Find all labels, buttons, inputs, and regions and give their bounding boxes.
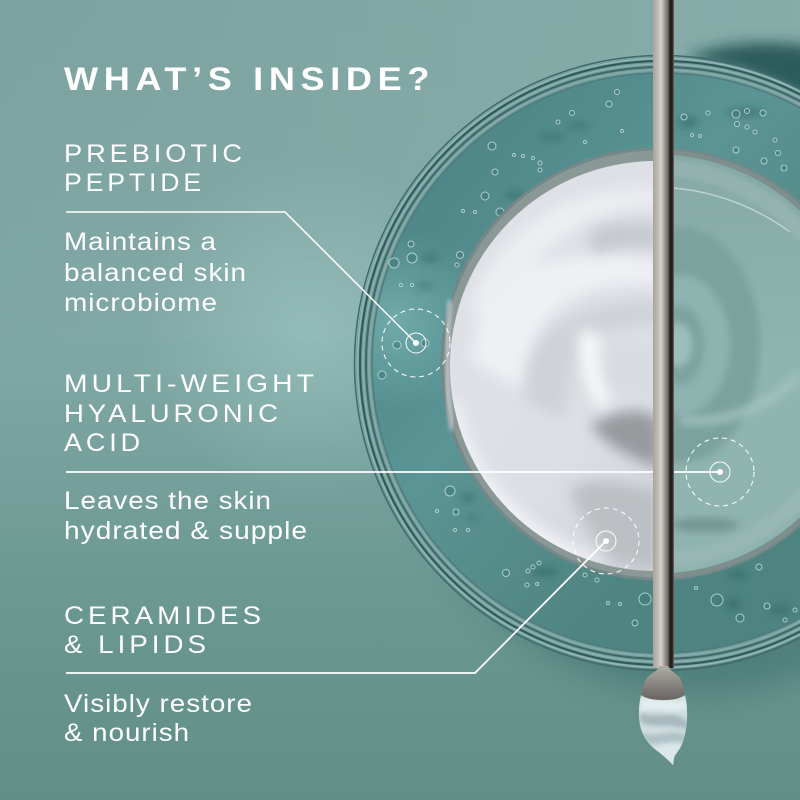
cream in bowl: [446, 161, 653, 571]
spatula head: [640, 666, 687, 712]
heading: ceramides and lipids: [64, 602, 265, 659]
heading: ceramides and lipids: & LIPIDS: [64, 631, 210, 659]
marker: ceramides and lipids: [573, 508, 639, 574]
heading: prebiotic peptide: PREBIOTIC: [64, 140, 246, 168]
description: prebiotic peptide: [64, 228, 247, 317]
description: prebiotic peptide: microbiome: [64, 289, 218, 317]
section: prebiotic peptide: [64, 140, 247, 317]
glass dish with gel ring: [354, 56, 800, 670]
callout line: ceramides and lipids: [66, 541, 606, 673]
description: ceramides and lipids: & nourish: [64, 719, 190, 747]
marker: hyaluronic acid: [686, 438, 754, 506]
dish rim lines: [354, 56, 800, 670]
description: hyaluronic acid: hydrated & supple: [64, 517, 308, 545]
description: prebiotic peptide: Maintains a: [64, 228, 217, 256]
see-through bowl, right of spatula: [674, 150, 800, 578]
cream dollop: [638, 695, 688, 765]
description: ceramides and lipids: [64, 690, 253, 747]
description: hyaluronic acid: Leaves the skin: [64, 487, 272, 515]
heading: ceramides and lipids: CERAMIDES: [64, 602, 265, 630]
gel blotches: [416, 108, 790, 615]
section: ceramides and lipids: [64, 602, 265, 747]
dish shadow: [480, 33, 800, 702]
inner bowl rim: [442, 149, 800, 579]
heading: hyaluronic acid: ACID: [64, 429, 144, 457]
bubbles: [378, 90, 797, 626]
marker: prebiotic peptide: [382, 309, 450, 377]
heading: prebiotic peptide: PEPTIDE: [64, 169, 205, 197]
description: ceramides and lipids: Visibly restore: [64, 690, 253, 718]
description: prebiotic peptide: balanced skin: [64, 259, 247, 287]
metal spatula: [636, 0, 690, 768]
heading: hyaluronic acid: MULTI-WEIGHT: [64, 370, 318, 398]
callout line: hyaluronic acid: [66, 471, 720, 473]
section: hyaluronic acid: [64, 370, 318, 545]
description: hyaluronic acid: [64, 487, 308, 545]
translucent bowl wall highlight: [447, 300, 452, 430]
heading: hyaluronic acid: [64, 370, 318, 457]
heading: hyaluronic acid: HYALURONIC: [64, 400, 282, 428]
title: WHAT’S INSIDE?: [64, 61, 435, 97]
heading: prebiotic peptide: [64, 140, 246, 197]
callout line: prebiotic peptide: [66, 212, 416, 343]
